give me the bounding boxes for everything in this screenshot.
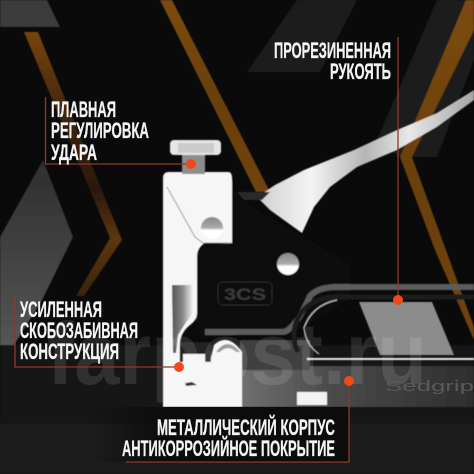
label: reinforced stapling construction: КОНСТРУКЦИЯ <box>20 339 119 364</box>
handle outline <box>205 287 474 332</box>
label: metal body, anti-corrosion coating <box>122 415 335 461</box>
callout dot: body <box>344 376 354 386</box>
lower handle body <box>240 366 474 407</box>
adjustment knob <box>170 140 221 155</box>
label: smooth impact adjustment <box>51 97 149 165</box>
callout dot: knob <box>186 159 196 169</box>
upper silver handle <box>257 90 474 233</box>
brand imprint: Sedgrip <box>385 378 474 395</box>
window shape in handle <box>359 302 454 355</box>
callout lines <box>15 37 398 462</box>
panel: bottom label backing <box>90 407 349 462</box>
label: reinforced stapling construction: УСИЛЕННАЯ <box>20 297 102 322</box>
watermark: farpost.ru <box>47 304 427 403</box>
callout dot: grip <box>393 295 403 305</box>
label: smooth impact adjustment: РЕГУЛИРОВКА <box>51 118 149 143</box>
label: smooth impact adjustment: ПЛАВНАЯ <box>51 97 116 122</box>
label: reinforced stapling construction: СКОБОЗАБИВНАЯ <box>20 318 138 343</box>
housing fold line <box>167 187 230 243</box>
brand logo badge <box>218 282 272 305</box>
label: rubberized handle <box>274 38 391 84</box>
label: smooth impact adjustment: УДАРА <box>51 140 97 165</box>
staple slot <box>181 342 211 362</box>
label: rubberized handle: РУКОЯТЬ <box>330 59 391 84</box>
callout dot: construction <box>174 362 184 372</box>
label: reinforced stapling construction <box>20 297 138 364</box>
white housing <box>163 172 242 407</box>
label: rubberized handle: ПРОРЕЗИНЕННАЯ <box>274 38 391 63</box>
stapler illustration <box>163 90 474 407</box>
rivets <box>201 217 223 239</box>
brand logo badge: 3CS <box>224 285 266 304</box>
label: metal body, anti-corrosion coating: МЕТАЛЛИЧЕСКИЙ КОРПУС <box>157 415 335 440</box>
black plate <box>196 178 350 340</box>
